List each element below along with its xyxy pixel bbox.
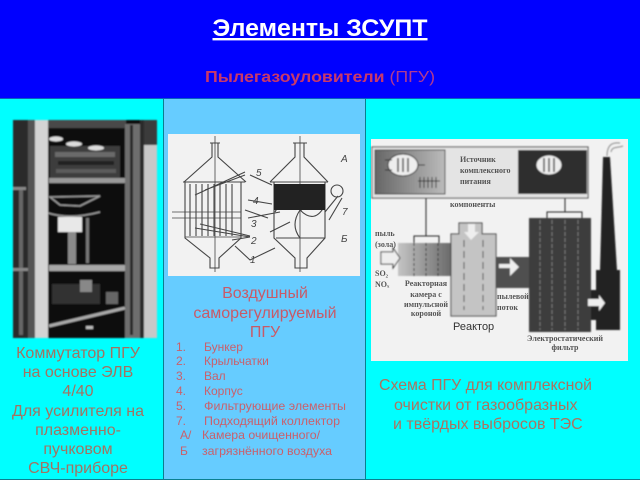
reactor chamber: [398, 243, 451, 276]
legend list: Подходящий коллектор: [204, 414, 340, 428]
photo: commutator cabinet: [13, 120, 157, 338]
scheme labels: камера с: [410, 290, 442, 299]
caption: commutator: пучковом: [43, 441, 113, 458]
diagram: dust collector units: 1: [250, 255, 256, 266]
caption: scheme: [379, 377, 592, 433]
legend list: Камера очищенного/: [202, 428, 321, 442]
caption: commutator: плазменно-: [35, 422, 121, 439]
diagram: dust collector units: 5: [256, 168, 262, 179]
panel: right scheme: [365, 99, 640, 479]
legend list: 7.: [176, 414, 186, 428]
legend list: 1.: [176, 340, 186, 354]
diagram: dust collector units: 2: [250, 236, 257, 247]
scheme labels: (зола): [375, 240, 396, 249]
scheme labels: Электростатический: [527, 334, 603, 343]
legend list: Фильтрующие элементы: [204, 399, 346, 413]
diagram: dust collector units: 3: [251, 219, 257, 230]
power source box: [372, 147, 588, 198]
heading: air self-regulating: [193, 285, 337, 341]
scheme labels: поток: [497, 303, 518, 312]
heading: air self-regulating: саморегулируемый: [193, 305, 337, 322]
legend list: Корпус: [204, 384, 243, 398]
scheme labels: пыль: [375, 229, 395, 238]
caption: commutator: СВЧ-приборе: [28, 460, 128, 477]
header band: [0, 0, 640, 99]
heading: air self-regulating: ПГУ: [250, 324, 281, 341]
heading: air self-regulating: Воздушный: [222, 285, 308, 302]
legend list: 3.: [176, 369, 186, 383]
legend list: 2.: [176, 354, 186, 368]
legend list: загрязнённого воздуха: [202, 444, 332, 458]
scheme labels: питания: [460, 177, 491, 186]
panel: middle air dust collector: [164, 99, 365, 479]
diagram: dust collector units: 4: [253, 196, 259, 207]
scheme labels: Реактор: [453, 321, 494, 333]
inlet arrow: [381, 248, 400, 268]
legend list: Крыльчатки: [204, 354, 269, 368]
chimney: [588, 143, 623, 330]
scheme labels: комплексного: [460, 166, 510, 175]
caption: commutator: Для усилителя на: [12, 403, 144, 420]
legend list: 4.: [176, 384, 186, 398]
legend list: [176, 340, 346, 458]
scheme labels: Реакторная: [405, 279, 448, 288]
legend list: Бункер: [204, 340, 243, 354]
panel: left commutator: [0, 98, 640, 480]
caption: scheme: Схема ПГУ для комплексной: [379, 377, 592, 394]
subtitle: Пылегазоуловители (ПГУ): [205, 69, 435, 86]
caption: scheme: очистки от газообразных: [394, 397, 577, 414]
scheme labels: компоненты: [450, 200, 496, 209]
scheme labels: SO₂: [375, 269, 389, 278]
caption: commutator: 4/40: [62, 383, 94, 400]
electrostatic filter: [529, 218, 591, 332]
caption: scheme: и твёрдых выбросов ТЭС: [393, 416, 583, 433]
scheme labels: Источник: [460, 155, 496, 164]
scheme labels: [375, 155, 603, 352]
scheme labels: NOₓ: [375, 280, 390, 289]
caption: commutator: Коммутатор ПГУ: [16, 345, 141, 362]
scheme labels: короной: [411, 309, 441, 318]
flue duct: [496, 257, 529, 288]
diagram: TES cleaning scheme: [371, 139, 628, 361]
legend list: Вал: [204, 369, 226, 383]
caption: commutator: [12, 345, 144, 477]
legend list: А/: [180, 428, 192, 442]
diagram: dust collector units: [168, 134, 360, 276]
reactor: [451, 223, 496, 316]
diagram: dust collector units: 7: [342, 207, 348, 218]
title: Элементы ЗСУПТ: [212, 15, 428, 42]
scheme labels: пылевой: [497, 292, 529, 301]
diagram: dust collector units: Б: [341, 234, 348, 245]
legend list: Б: [180, 444, 188, 458]
scheme labels: импульсной: [404, 300, 448, 309]
scheme labels: фильтр: [551, 343, 579, 352]
diagram: dust collector units: А: [340, 154, 348, 165]
legend list: 5.: [176, 399, 186, 413]
caption: commutator: на основе ЭЛВ: [23, 364, 133, 381]
